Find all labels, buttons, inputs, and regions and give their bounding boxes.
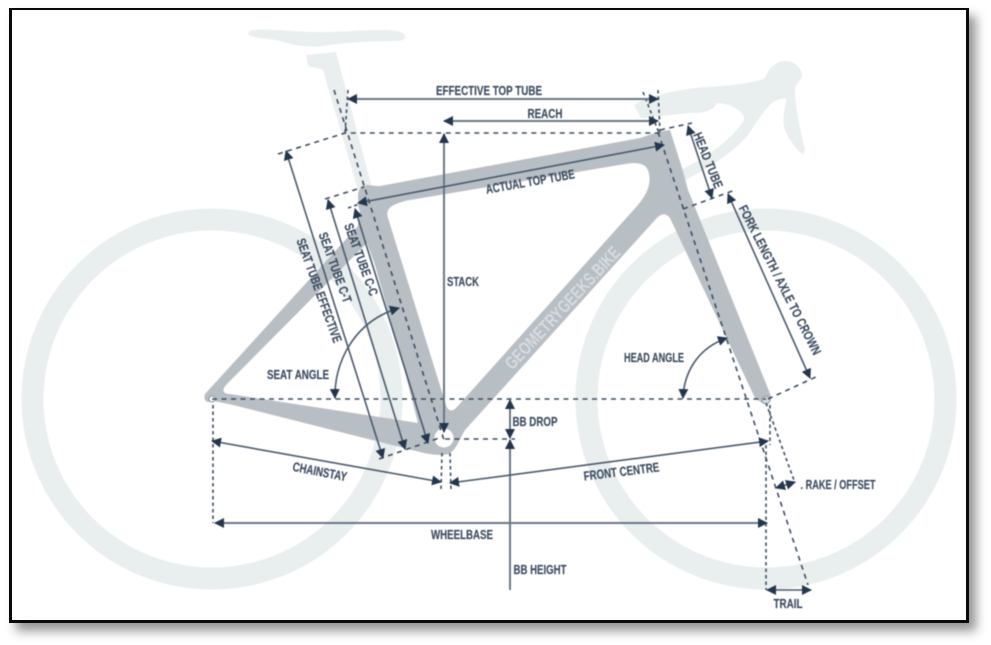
handlebar and stem	[634, 61, 805, 181]
downtube watermark: GEOMETRYGEEKS.BIKE	[501, 243, 624, 373]
front wheel	[586, 220, 946, 578]
seat tube c-t dimension	[316, 200, 405, 449]
saddle	[248, 30, 405, 46]
stack dimension: STACK	[447, 274, 479, 289]
actual top tube dimension: ACTUAL TOP TUBE	[485, 166, 576, 197]
head angle arc: HEAD ANGLE	[624, 350, 684, 365]
head tube dimension: HEAD TUBE	[690, 130, 726, 191]
seat tube c-c dimension	[341, 209, 428, 443]
trail dimension: TRAIL	[774, 596, 803, 611]
head angle arc	[624, 338, 727, 398]
actual top tube dimension	[358, 145, 664, 203]
seat tube c-t dimension: SEAT TUBE C-T	[316, 230, 355, 305]
rake offset dimension	[776, 477, 876, 492]
effective top tube dimension: EFFECTIVE TOP TUBE	[436, 83, 542, 98]
front centre dimension: FRONT CENTRE	[583, 459, 660, 484]
seat angle arc: SEAT ANGLE	[267, 367, 329, 382]
seat angle arc	[267, 308, 399, 398]
bb drop dimension: BB DROP	[512, 414, 558, 429]
dashed construction lines	[212, 90, 818, 590]
rear wheel	[32, 220, 392, 578]
trail dimension	[767, 590, 811, 611]
bb height dimension: BB HEIGHT	[514, 562, 567, 577]
wheelbase dimension: WHEELBASE	[431, 527, 493, 542]
seat tube c-c dimension: SEAT TUBE C-C	[341, 221, 381, 298]
fork length dimension: FORK LENGTH / AXLE TO CROWN	[736, 203, 824, 357]
head tube dimension	[688, 126, 726, 198]
seatpost	[306, 52, 372, 190]
front centre dimension	[450, 441, 768, 484]
seat tube effective dimension: SEAT TUBE EFFECTIVE	[293, 236, 345, 345]
rake offset dimension: . RAKE / OFFSET	[800, 477, 876, 492]
bike frame	[204, 130, 771, 455]
fork length dimension	[728, 194, 824, 378]
rear dropout	[209, 396, 215, 402]
reach dimension: REACH	[528, 106, 562, 121]
front dropout	[762, 396, 770, 404]
chainstay dimension	[212, 441, 441, 484]
seat tube effective dimension	[286, 151, 383, 458]
seat tube overlay on seat stay junction	[358, 188, 447, 446]
bottom bracket hole	[434, 428, 454, 448]
chainstay dimension: CHAINSTAY	[291, 459, 349, 484]
bb drop dimension	[510, 400, 558, 438]
